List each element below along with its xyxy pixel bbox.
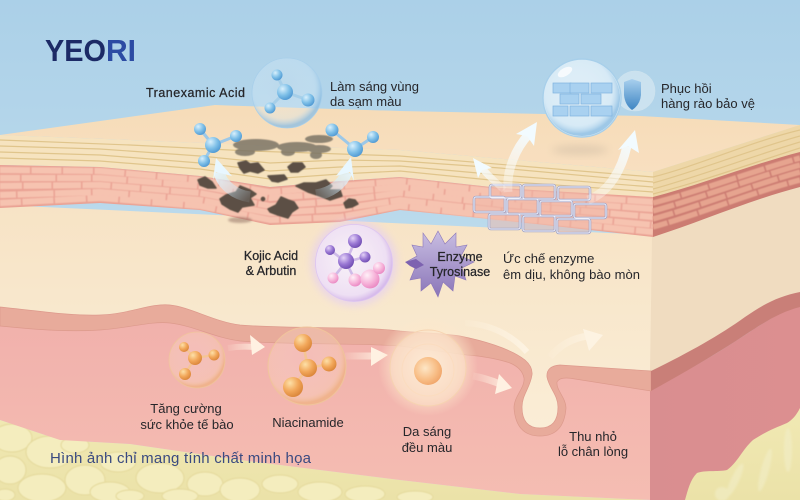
epidermis: front brick cell layer [0,165,653,237]
text: minimize pores [558,429,628,459]
text: barrier restoration: Phục hồi [661,81,712,96]
arrow: arc toward pore [465,323,527,352]
text: barrier restoration [661,81,755,111]
molecule: left blue molecule [194,123,242,167]
dermis: right side [650,305,800,500]
bubble shadow [552,145,608,155]
arrow: small white arrow left of bricks [473,158,504,190]
epidermis: right side cell layer [653,152,800,237]
arrow: white arrow to brick bubble [508,122,537,192]
text: strengthen cell health: sức khỏe tế bào [140,417,234,432]
stratum corneum: layered lines [0,125,800,198]
text: strengthen cell health: Tăng cường [150,401,222,416]
label: Tranexamic Acid: Tranexamic Acid [146,86,245,100]
icon: enzyme star [405,231,474,297]
text: skin lightening benefit: Làm sáng vùng [330,79,419,94]
text: enzyme inhibition: êm dịu, không bào mòn [503,267,640,282]
bubble: Kojic Acid & Arbutin molecule [311,220,397,306]
skin block: top surface [0,105,800,172]
arrow: white arrow to shield [588,130,639,200]
dermis: front [0,323,651,500]
text: dark areas line two: da sạm màu [330,94,402,109]
dark pigment spots [198,135,358,223]
logo: YEORI: RI [106,33,136,68]
text: even skin tone: đều màu [402,440,452,455]
bubble: small orange molecule [169,332,225,388]
bubble: shield [615,71,655,111]
molecule: right blue molecule [326,124,379,157]
arrow: arc out of pore [550,329,603,357]
logo: YEORI: YEO [45,33,106,68]
bubble: even skin tone [378,316,478,416]
dermal junction band [0,292,800,436]
label: Enzyme Tyrosinase: Tyrosinase [430,265,490,279]
text: barrier restoration: hàng rào bảo vệ [661,96,755,111]
text: minimize pores: Thu nhỏ [569,429,617,444]
label: Enzyme Tyrosinase [430,250,490,279]
disclaimer note: Hình ảnh chỉ mang tính chất minh họa [50,450,312,467]
text: even skin tone: Da sáng [403,424,451,439]
text: enzyme inhibition: Ức chế enzyme [503,251,594,266]
text: enzyme inhibition [503,251,640,282]
label: Kojic Acid & Arbutin: & Arbutin [246,264,296,278]
label: Kojic Acid & Arbutin: Kojic Acid [244,249,298,263]
arrow: orange arrow three [473,374,512,394]
text: even skin tone [402,424,452,455]
arrow: left blue arrow from spots [213,158,250,197]
arrow: right blue arrow from spots [316,157,354,195]
bubble: Tranexamic Acid molecule [252,58,322,128]
bubble: Niacinamide molecule [268,327,346,405]
text: minimize pores: lỗ chân lòng [558,444,628,459]
bubble: brick wall [543,59,621,137]
label: Niacinamide: Niacinamide [272,415,344,430]
arrow: orange arrow two [345,347,388,366]
label: Enzyme Tyrosinase: Enzyme [437,250,483,264]
fat layer [0,405,800,500]
skin block: right beige side [650,125,800,372]
text: strengthen cell health [140,401,234,432]
label: Kojic Acid & Arbutin [244,249,298,278]
skin block: front beige layer [0,205,653,428]
arrow: orange arrow one [228,335,265,355]
brick wall barrier [474,185,606,233]
